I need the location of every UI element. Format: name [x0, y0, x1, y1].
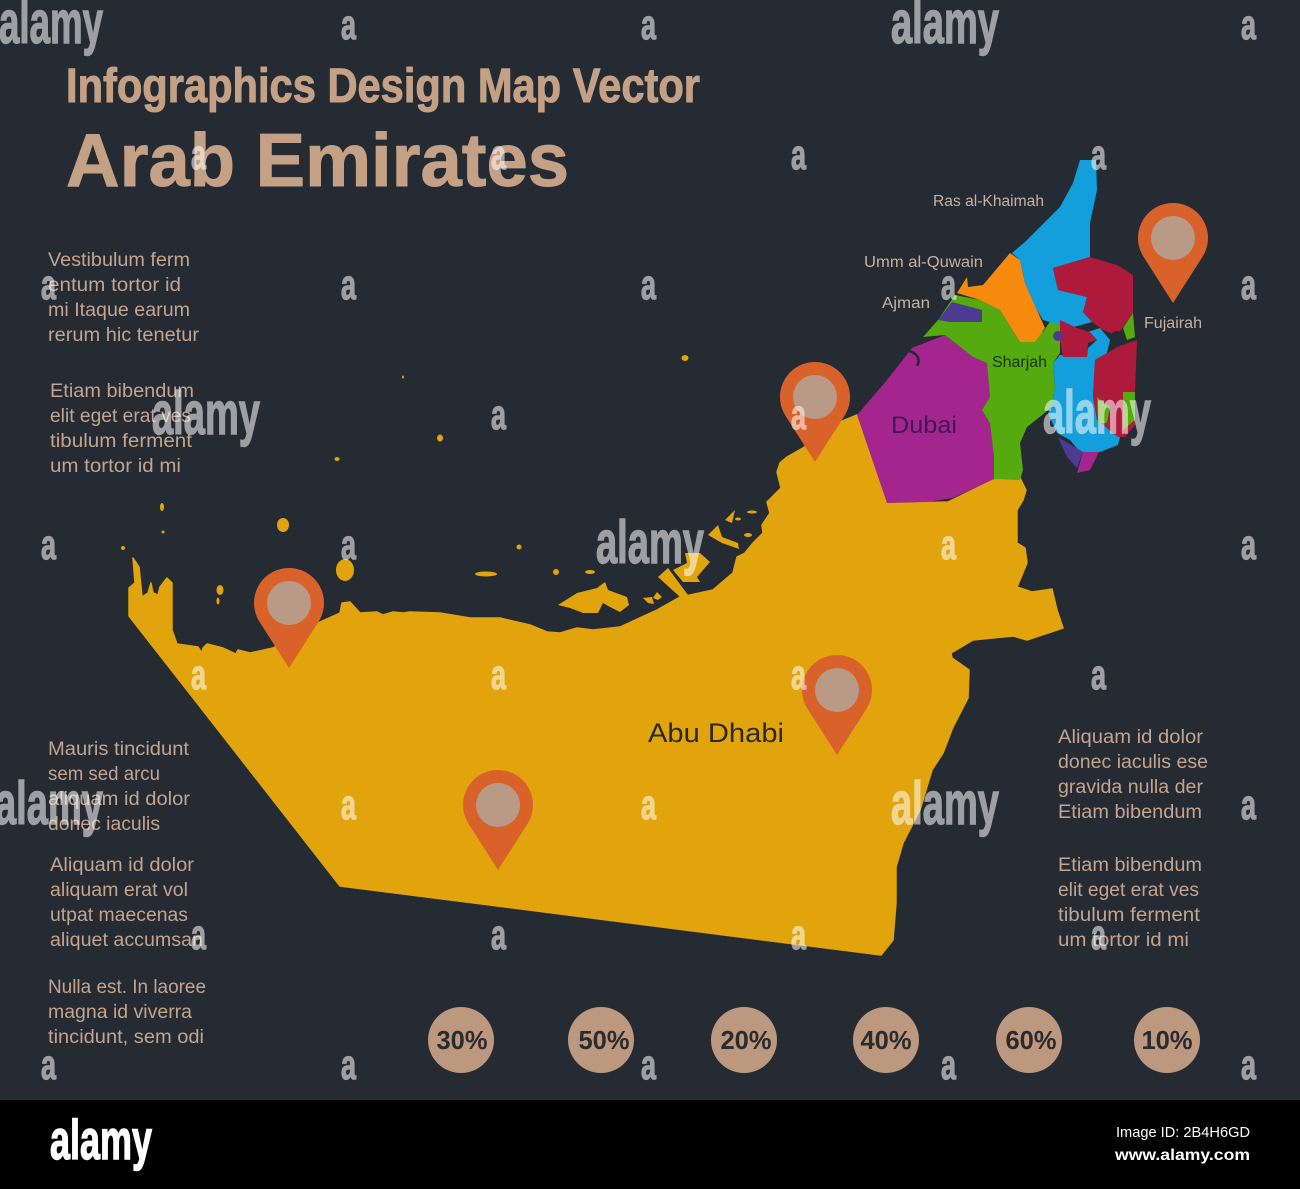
watermark pattern: a: [641, 1, 656, 48]
title: Infographics Design Map Vector: [66, 60, 700, 113]
pin: east Abu Dhabi: [802, 655, 872, 755]
region labels: Ras al-Khaimah: [933, 193, 1044, 210]
region: Fujairah north: [1053, 257, 1133, 335]
percent badge 20%: [711, 1007, 777, 1073]
watermark pattern: a: [191, 911, 206, 958]
footer logo: alamy: [50, 1108, 152, 1171]
text block: lower left 2: aliquam erat vol: [50, 880, 188, 901]
percent badge 20%: 20%: [720, 1025, 772, 1055]
watermark pattern: a: [941, 521, 956, 568]
text block: right 1: Etiam bibendum: [1058, 802, 1202, 823]
watermark pattern: a: [641, 261, 656, 308]
percent badge 50%: [568, 1007, 634, 1073]
watermark pattern: alamy: [0, 770, 103, 837]
watermark pattern: a: [791, 131, 806, 178]
text block: top left 1: rerum hic tenetur: [48, 325, 200, 346]
region labels: Fujairah: [1144, 315, 1202, 332]
text block: lower left 1: sem sed arcu: [48, 764, 160, 785]
watermark pattern: alamy: [891, 770, 999, 837]
islands: [121, 355, 757, 613]
text block: lower left 2: aliquet accumsan: [50, 930, 203, 951]
map of the United Arab Emirates: [121, 160, 1137, 955]
watermark pattern: a: [941, 1041, 956, 1088]
region labels: Ajman: [882, 295, 930, 312]
text block: lower left 3: Nulla est. In laoree: [48, 977, 206, 998]
text block: top left 1: mi Itaque earum: [48, 300, 190, 321]
region: Sharjah: [923, 295, 1060, 480]
percent badge 10%: [1134, 1007, 1200, 1073]
watermark pattern: a: [1091, 651, 1106, 698]
percent badge 60%: [996, 1007, 1062, 1073]
percent badge 50%: 50%: [578, 1025, 630, 1055]
watermark pattern: a: [491, 651, 506, 698]
text block: top left 2: elit eget erat ves: [50, 406, 191, 427]
region labels: Abu Dhabi: [648, 718, 784, 748]
text block: lower left 3: tincidunt, sem odi: [48, 1027, 204, 1048]
region: Ras al-Khaimah south: [1048, 328, 1120, 452]
text block: top left 2: Etiam bibendum: [50, 381, 194, 402]
watermark pattern: alamy: [596, 509, 704, 576]
text block: top left 2: um tortor id mi: [50, 456, 181, 477]
image id: Image ID: 2B4H6GD: [1116, 1124, 1250, 1141]
text block: top left 2: [50, 381, 194, 477]
percent badge 30%: [428, 1007, 494, 1073]
creek: [909, 351, 919, 366]
watermark pattern: a: [41, 521, 56, 568]
watermark pattern: alamy: [152, 380, 260, 447]
pin: Fujairah: [1138, 203, 1208, 303]
text block: lower left 1: [48, 739, 191, 835]
watermark pattern: a: [191, 651, 206, 698]
watermark pattern: a: [491, 911, 506, 958]
watermark pattern: a: [1241, 781, 1256, 828]
watermark pattern: a: [41, 261, 56, 308]
region labels: [648, 193, 1202, 748]
watermark pattern: a: [1241, 521, 1256, 568]
text block: lower left 1: Mauris tincidunt: [48, 739, 190, 760]
text block: top left 1: [48, 250, 200, 346]
region: Fujairah middle: [1060, 320, 1097, 357]
watermark pattern: a: [341, 1041, 356, 1088]
enclave: Sharjah east: [1123, 313, 1135, 340]
watermark pattern: a: [491, 391, 506, 438]
watermark pattern: a: [641, 1041, 656, 1088]
watermark pattern: alamy: [1043, 379, 1151, 446]
region labels: Dubai: [891, 412, 957, 439]
text block: lower left 1: donec iaculis: [48, 814, 160, 835]
pin: north coast: [780, 362, 850, 462]
region labels: Umm al-Quwain: [864, 254, 983, 271]
watermark pattern: a: [641, 781, 656, 828]
region: Abu Dhabi: [129, 415, 1063, 955]
region: Dubai: [857, 335, 994, 503]
watermark pattern: a: [1091, 131, 1106, 178]
percent badge 60%: 60%: [1006, 1025, 1056, 1055]
text block: lower left 3: magna id viverra: [48, 1002, 192, 1023]
region: Ajman: [938, 302, 982, 322]
percent badge 10%: 10%: [1142, 1025, 1192, 1055]
enclave: southern purple: [1058, 437, 1083, 468]
enclave: Sharjah south: [1123, 392, 1135, 430]
text block: lower left 2: Aliquam id dolor: [50, 855, 195, 876]
text block: right 2: Etiam bibendum: [1058, 855, 1202, 876]
enclave: green strip: [1097, 397, 1110, 423]
region: Fujairah south: [1093, 340, 1137, 437]
text block: lower left 2: [50, 855, 203, 951]
text block: right 2: um tortor id mi: [1058, 930, 1189, 951]
text block: right 1: gravida nulla der: [1058, 777, 1204, 798]
enclave: southern magenta: [1077, 452, 1099, 473]
watermark pattern: a: [1091, 911, 1106, 958]
watermark pattern: a: [1241, 1, 1256, 48]
watermark pattern: a: [191, 131, 206, 178]
watermark pattern: a: [791, 911, 806, 958]
text block: right 2: tibulum ferment: [1058, 905, 1201, 926]
text block: top left 2: tibulum ferment: [50, 431, 193, 452]
text block: right 1: Aliquam id dolor: [1058, 727, 1204, 748]
title: Arab Emirates: [66, 118, 569, 202]
watermark pattern: a: [341, 261, 356, 308]
text block: right 1: donec iaculis ese: [1058, 752, 1208, 773]
pin: west coast: [254, 568, 324, 668]
watermark pattern: a: [791, 651, 806, 698]
watermark pattern: a: [341, 781, 356, 828]
title: [66, 60, 700, 202]
watermark pattern: a: [341, 521, 356, 568]
watermark pattern: a: [491, 131, 506, 178]
watermark pattern: a: [791, 391, 806, 438]
text block: top left 1: entum tortor id: [48, 275, 181, 296]
percent badge 40%: 40%: [860, 1025, 912, 1055]
pin: south Abu Dhabi: [463, 770, 533, 870]
watermark pattern: a: [41, 1041, 56, 1088]
percent badge 40%: [853, 1007, 919, 1073]
text block: lower left 3: [48, 977, 206, 1048]
text block: top left 1: Vestibulum ferm: [48, 250, 190, 271]
watermark pattern: a: [341, 1, 356, 48]
website: www.alamy.com: [1114, 1147, 1250, 1164]
region: Ras al-Khaimah: [1012, 160, 1097, 328]
watermark pattern: a: [941, 261, 956, 308]
text block: lower left 1: aliquam id dolor: [48, 789, 191, 810]
text block: lower left 2: utpat maecenas: [50, 905, 188, 926]
percent badge 30%: 30%: [436, 1025, 488, 1055]
footer bar: [0, 1100, 1300, 1189]
enclave: dark hole: [1110, 331, 1124, 345]
enclave: Ajman east: [1053, 331, 1063, 341]
text block: right 2: [1058, 855, 1202, 951]
text block: right 1: [1058, 727, 1208, 823]
watermark pattern: a: [1241, 1041, 1256, 1088]
region: Umm al-Quwain: [957, 253, 1045, 342]
text block: right 2: elit eget erat ves: [1058, 880, 1199, 901]
watermark pattern: a: [1241, 261, 1256, 308]
region labels: Sharjah: [992, 354, 1047, 371]
